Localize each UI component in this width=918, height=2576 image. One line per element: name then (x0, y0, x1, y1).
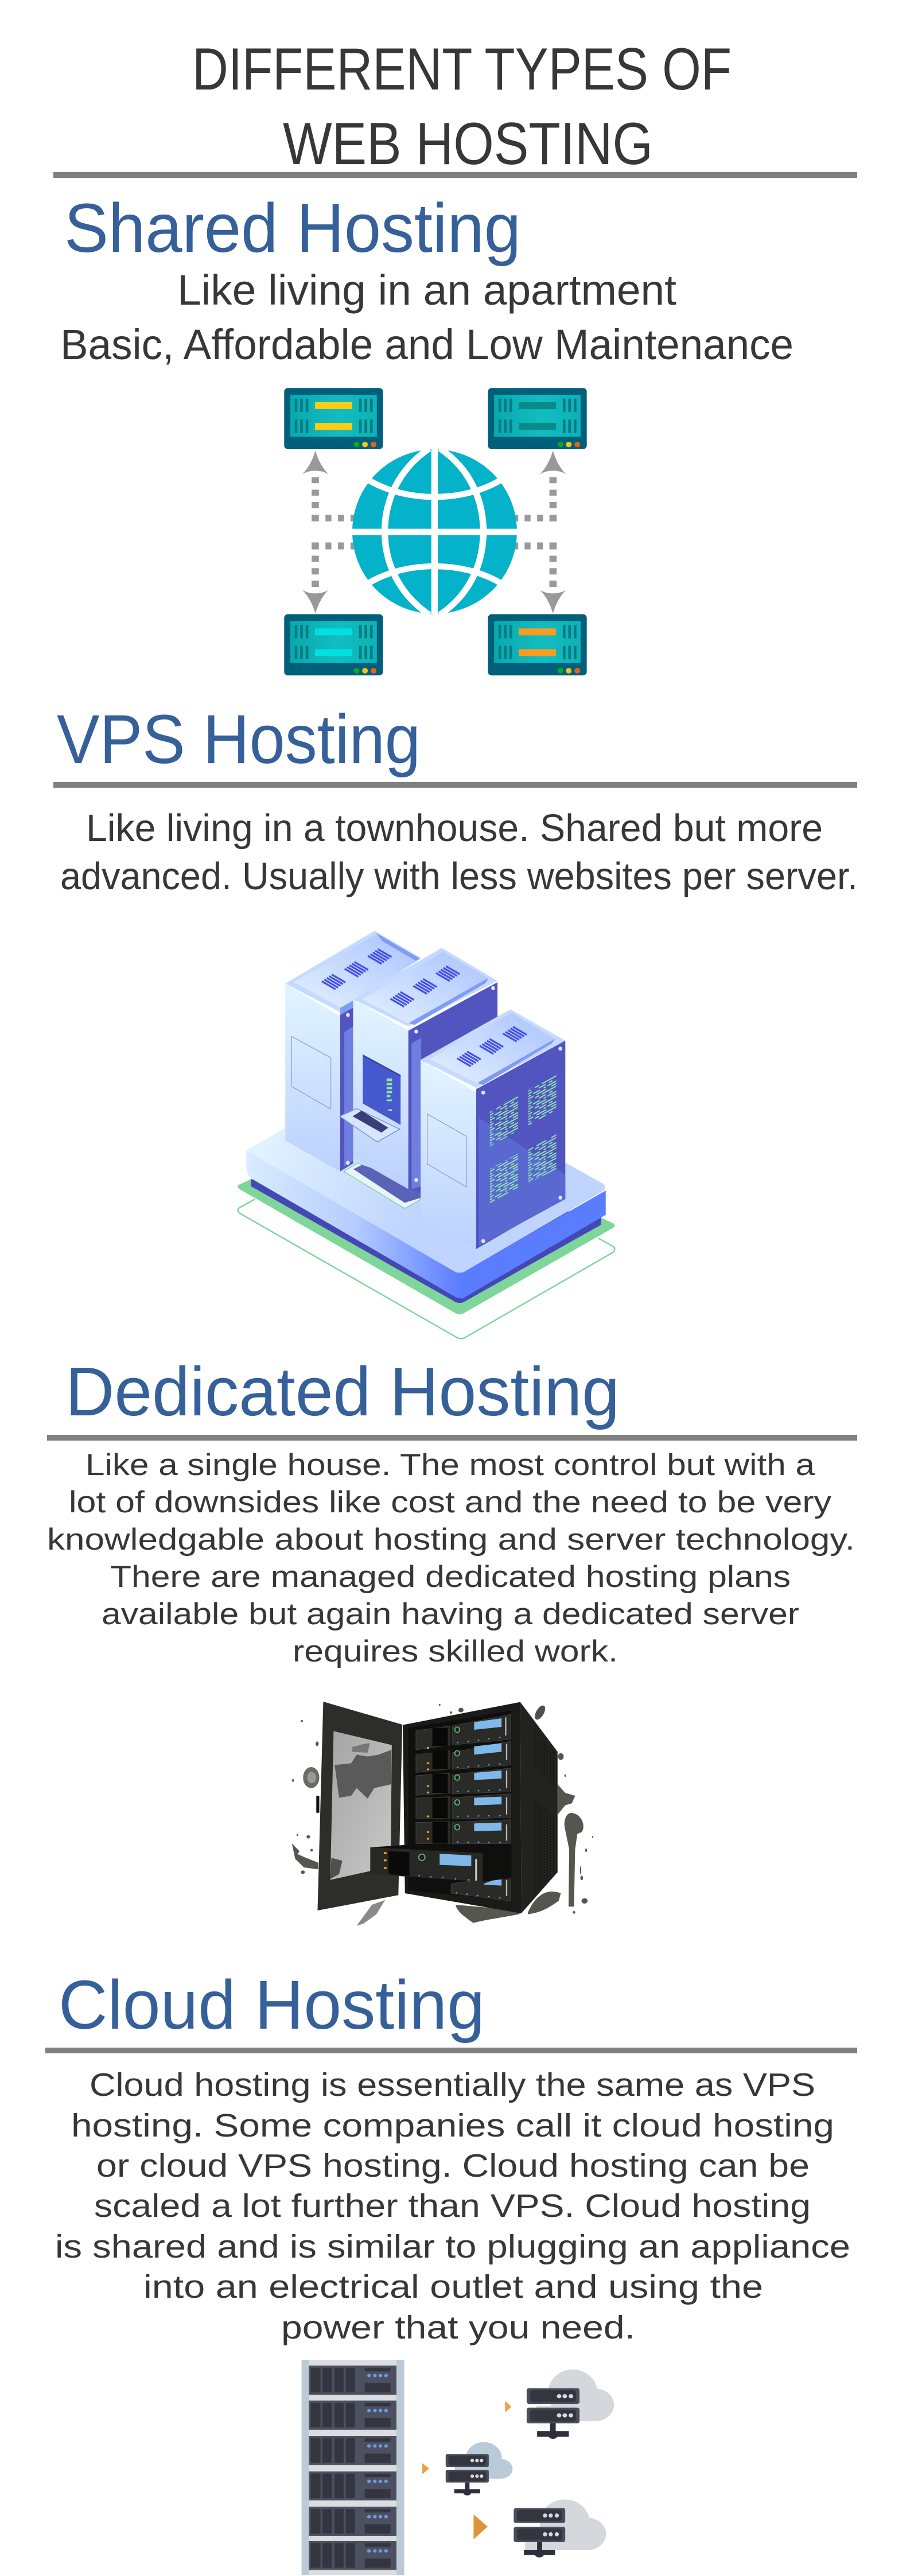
heading: Shared Hosting: Shared Hosting (64, 189, 521, 267)
text block: cloud description: hosting. Some companies call it cloud hosting (71, 2107, 834, 2144)
title: DIFFERENT TYPES OF (192, 36, 732, 103)
platform (246, 1128, 606, 1299)
text block: dedicated description: lot of downsides like cost and the need to be very (69, 1485, 832, 1519)
text block: cloud description: or cloud VPS hosting. Cloud hosting can be (96, 2147, 810, 2184)
text block: VPS description: advanced. Usually with less websites per server. (60, 855, 858, 898)
server: bottom left (284, 614, 383, 675)
rack 1 (285, 931, 421, 1172)
pull-out server drawer (368, 1845, 511, 1882)
screen with code (363, 1054, 400, 1125)
open door (316, 1702, 402, 1910)
title: WEB HOSTING (283, 111, 653, 177)
text block: shared hosting description: Basic, Affordable and Low Maintenance (60, 321, 793, 368)
server: bottom right (488, 614, 587, 675)
code lines (490, 1075, 557, 1204)
text block: VPS description: Like living in a townhouse. Shared but more (86, 807, 823, 850)
cloud server: bottom (473, 2500, 606, 2558)
cabinet body (403, 1702, 558, 1913)
server: top left (284, 388, 383, 449)
rack 3 (421, 1009, 565, 1249)
cloud server: top (505, 2369, 614, 2439)
server: top right (488, 388, 587, 449)
text block: cloud description: scaled a lot further than VPS. Cloud hosting (94, 2188, 811, 2224)
rack 2 (340, 948, 497, 1192)
title (192, 36, 732, 177)
heading: VPS Hosting: VPS Hosting (57, 700, 421, 778)
text block: dedicated description: There are managed dedicated hosting plans (110, 1560, 791, 1594)
text block: dedicated description (47, 1448, 855, 1668)
text block: cloud description: power that you need. (281, 2309, 635, 2346)
text block: VPS description (60, 807, 858, 898)
server rack (302, 2360, 404, 2575)
text block: cloud description: is shared and is similar to plugging an appliance (55, 2228, 850, 2265)
text block: cloud description: into an electrical outlet and using the (143, 2268, 763, 2305)
text block: dedicated description: knowledgable about hosting and server technology. (47, 1523, 855, 1557)
laptop keyboard (340, 1108, 400, 1142)
text block: shared hosting description: Like living in an apartment (177, 266, 676, 314)
icon: globe network with four servers (284, 388, 587, 675)
text block: shared hosting description (60, 266, 793, 368)
text block: cloud description: Cloud hosting is essentially the same as VPS (90, 2067, 815, 2103)
icon: open server cabinet with ink splatter (292, 1702, 593, 1926)
heading: Cloud Hosting: Cloud Hosting (59, 1966, 485, 2044)
floor shadow under rack 2 (344, 1163, 421, 1208)
cloud server: middle (422, 2442, 512, 2496)
text block: dedicated description: Like a single house. The most control but with a (85, 1448, 815, 1482)
dotted arrows (302, 450, 566, 614)
globe (350, 448, 519, 616)
rack units (416, 1714, 510, 1901)
heading: Dedicated Hosting: Dedicated Hosting (65, 1352, 620, 1430)
ink splatter (292, 1704, 593, 1926)
text block: cloud description (55, 2067, 850, 2346)
icon: server rack and cloud servers (302, 2360, 614, 2575)
green base outline (238, 1199, 614, 1338)
icon: isometric server racks (238, 931, 614, 1338)
text block: dedicated description: requires skilled work. (293, 1635, 618, 1668)
text block: dedicated description: available but again having a dedicated server (102, 1597, 799, 1631)
